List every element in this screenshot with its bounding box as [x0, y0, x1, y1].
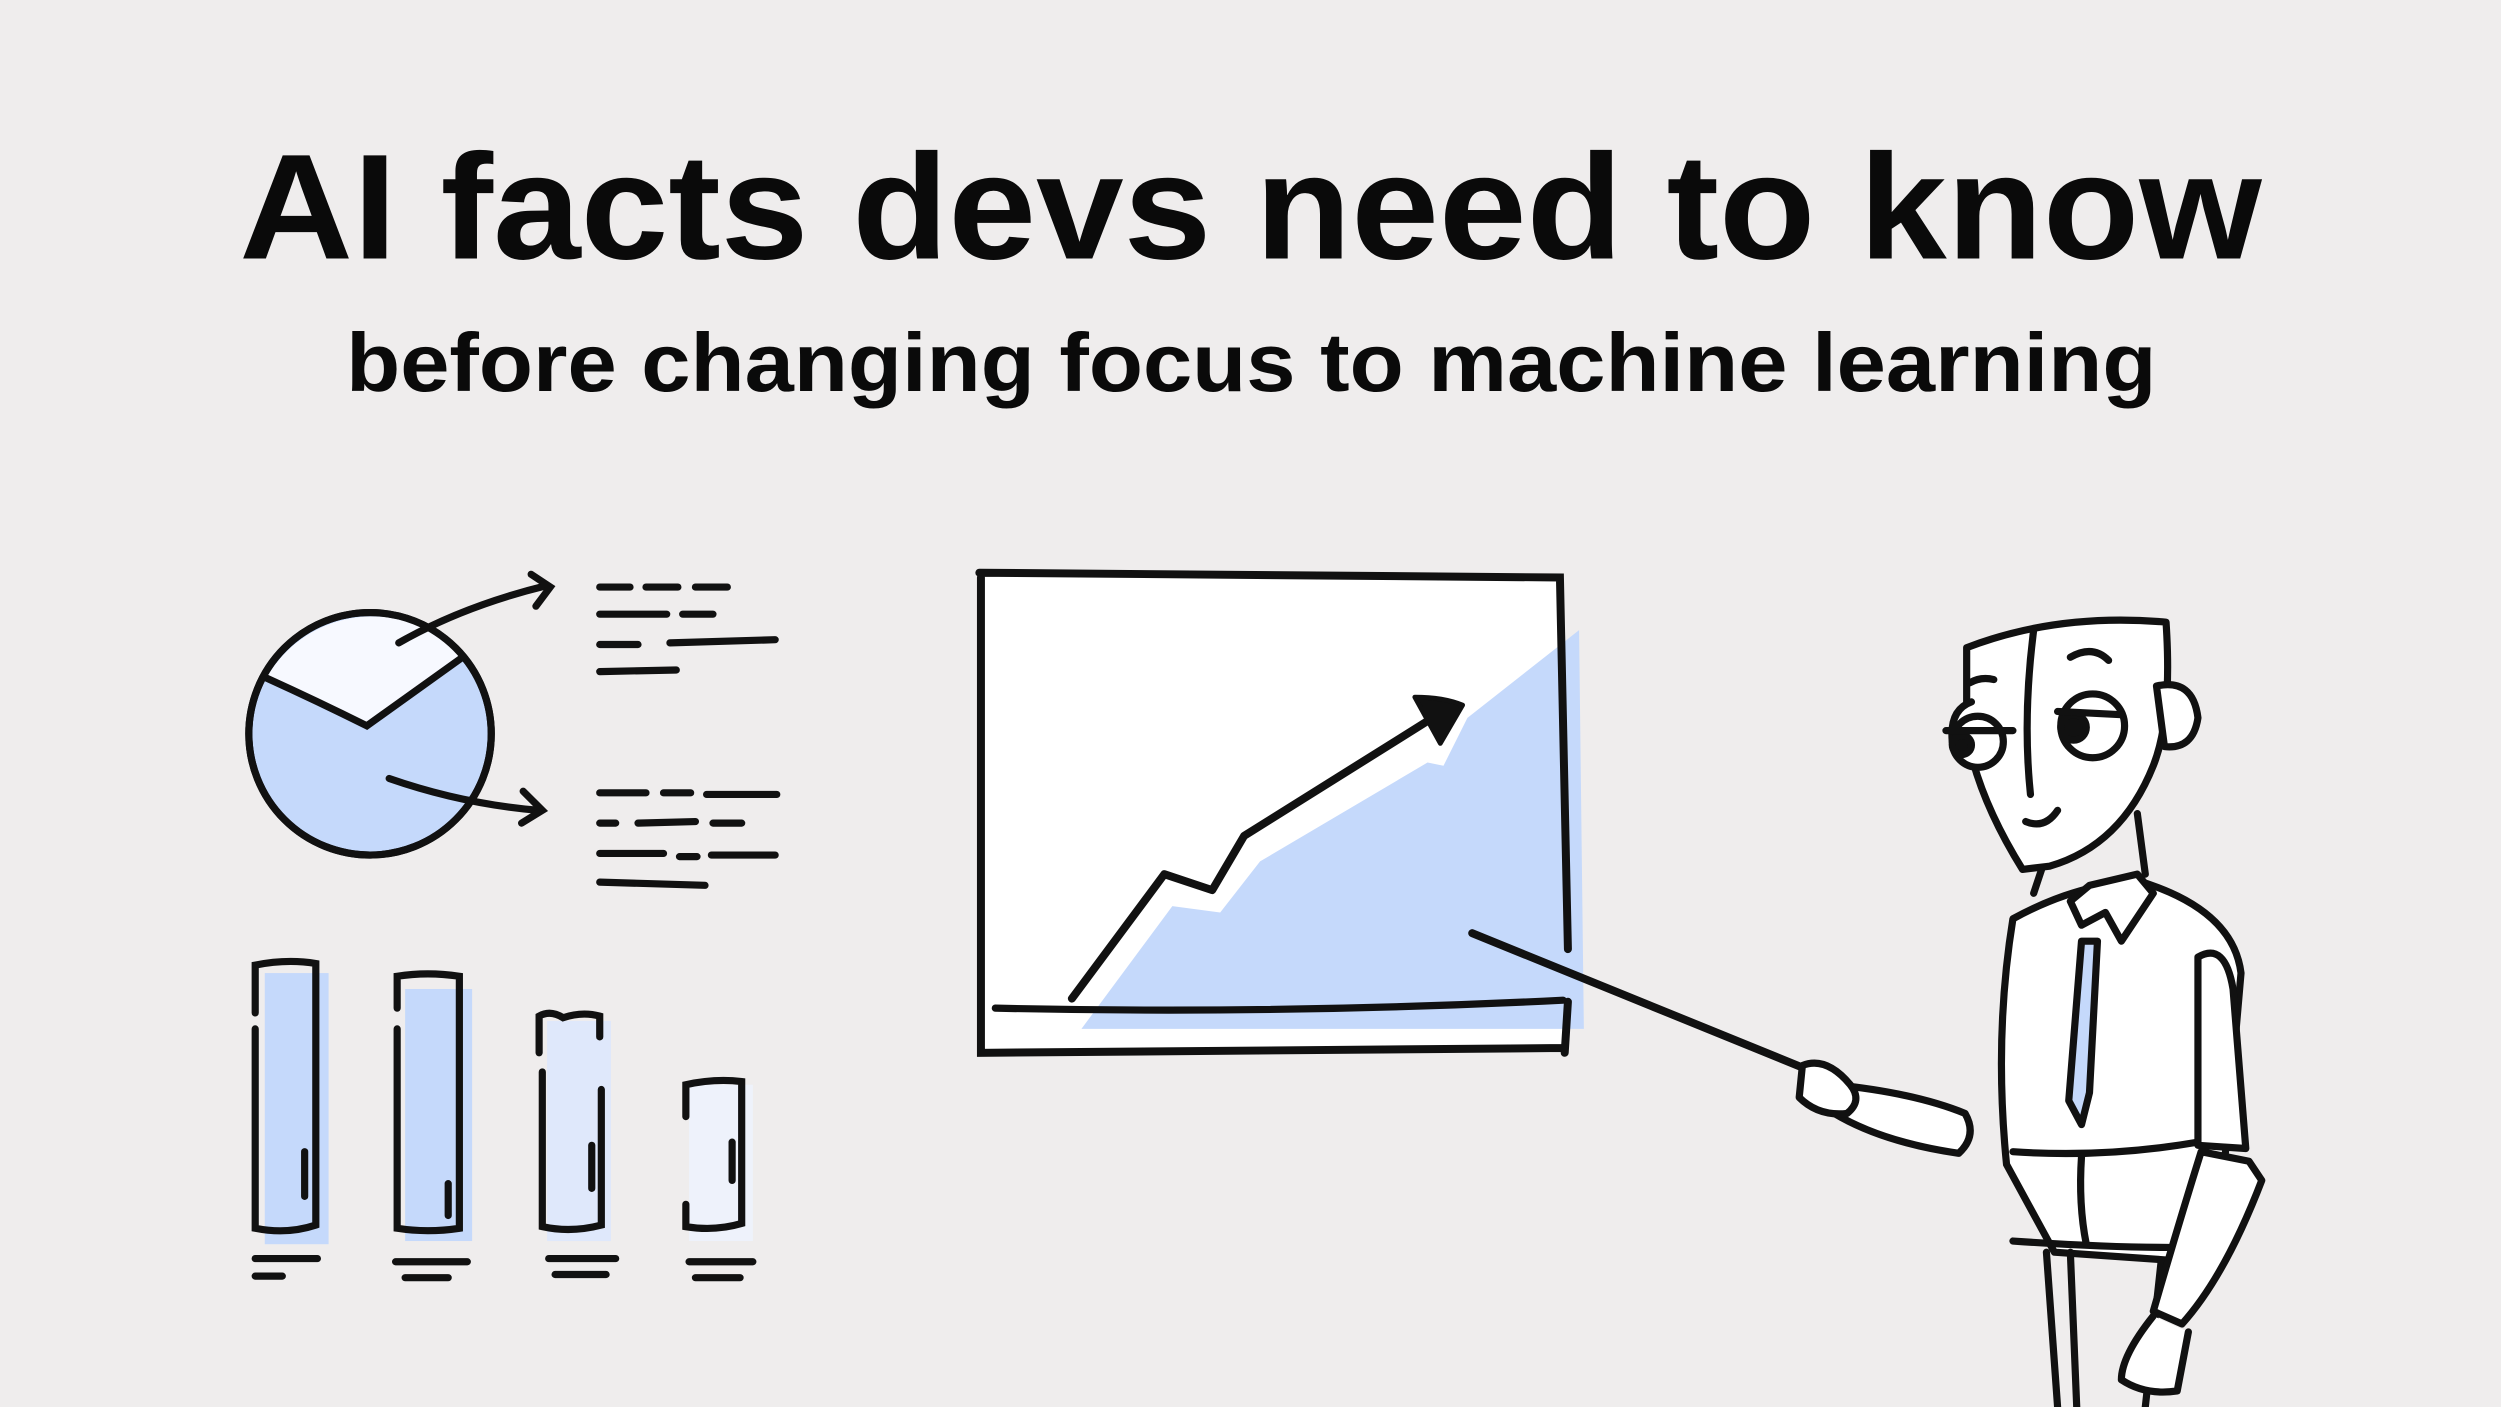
other arm — [2198, 953, 2246, 1149]
eyes — [2061, 694, 2125, 758]
bar chart — [255, 961, 753, 1278]
arrows from pie — [389, 574, 550, 823]
legs — [2046, 1252, 2161, 1407]
head — [1967, 620, 2168, 869]
subtitle: before changing focus to machine learning — [346, 316, 2156, 409]
chart area — [1081, 630, 1584, 1029]
pointer stick — [1472, 933, 1806, 1069]
collar — [2070, 874, 2153, 941]
arm holding pointer — [1834, 1085, 1970, 1153]
robot presenter — [1799, 620, 2262, 1407]
neck — [2034, 814, 2145, 893]
growth arrow — [1072, 721, 1428, 999]
smile — [2026, 810, 2058, 824]
belt — [2013, 1142, 2198, 1247]
pie chart — [249, 613, 491, 855]
text lines — [600, 587, 777, 885]
body — [2001, 881, 2241, 1260]
whiteboard — [979, 573, 1584, 1053]
ears — [2156, 685, 2198, 747]
tie — [2069, 941, 2097, 1125]
title: AI facts devs need to know — [239, 122, 2262, 290]
